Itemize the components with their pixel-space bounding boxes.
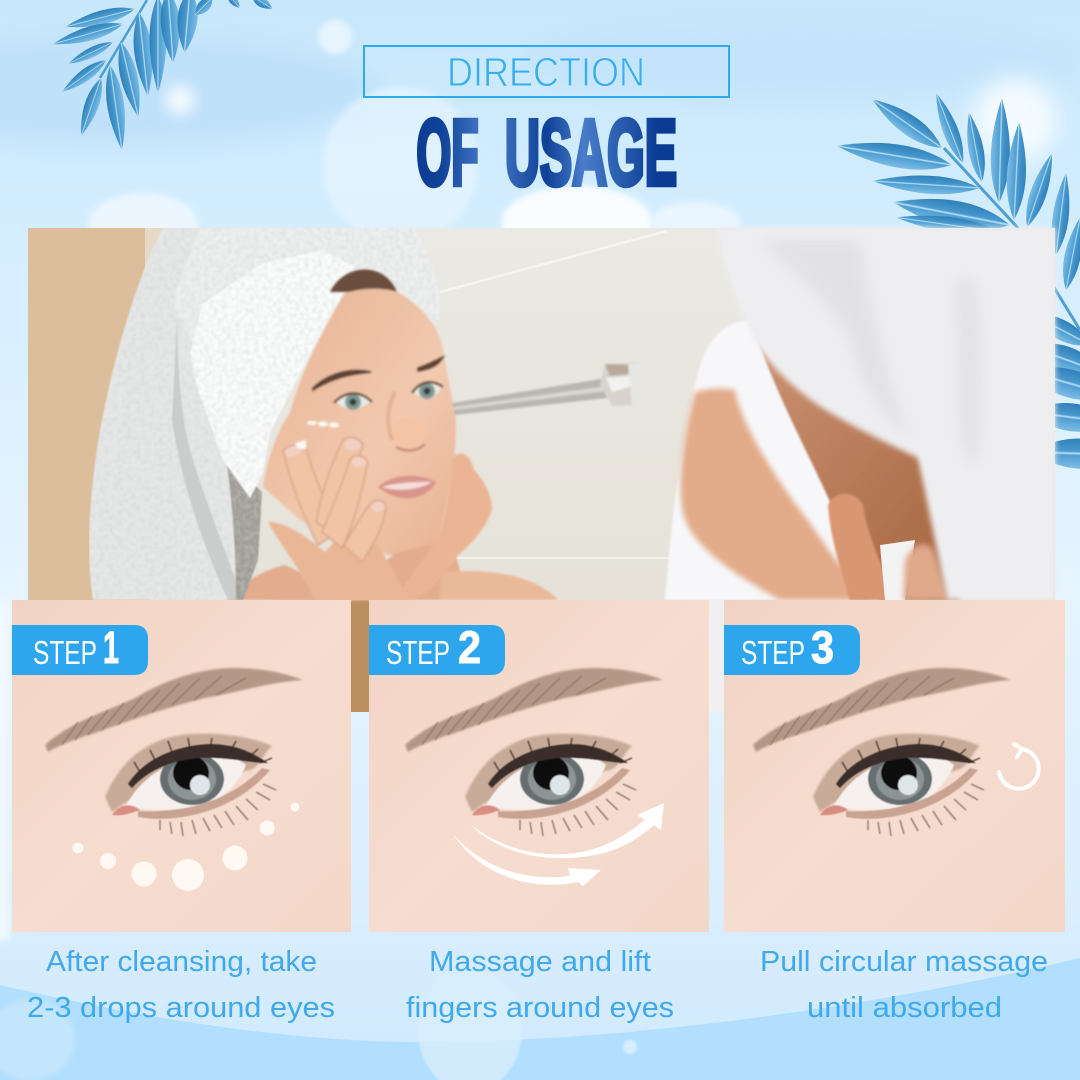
mirror skin [755, 340, 960, 600]
caption: step 2: fingers around eyes [406, 992, 674, 1024]
caption: step 1: After cleansing, take [46, 946, 317, 978]
title: OF USAGE: USAGE [505, 100, 677, 204]
small white towel [665, 320, 880, 600]
step 3 badge: STEP [741, 634, 805, 671]
leaves: top left [51, 0, 275, 151]
step 2 badge: 2 [458, 622, 481, 673]
massage arrow upper [471, 803, 664, 858]
step 2 badge: STEP [386, 634, 450, 671]
mirror thumb [828, 494, 895, 600]
step 1 badge [12, 622, 148, 675]
large blurred towel [717, 228, 1055, 600]
caption: step 3: Pull circular massage [760, 946, 1048, 978]
woman's left hand [395, 453, 492, 600]
massage arrow lower [453, 834, 601, 886]
title box: DIRECTION [364, 46, 729, 97]
circular massage arrow [999, 744, 1039, 789]
caption: step 1 [27, 946, 335, 1024]
title: OF USAGE: OF [416, 100, 478, 204]
step 3 badge: 3 [811, 622, 834, 673]
caption: step 2: Massage and lift [429, 946, 651, 978]
panel: step 1 [12, 600, 351, 932]
shoulder [222, 565, 360, 600]
photo wall [28, 228, 1055, 712]
caption: step 3 [760, 946, 1048, 1024]
step 2 badge [369, 622, 505, 675]
mirror hand [680, 389, 870, 600]
caption: step 2 [406, 946, 674, 1024]
eye close-up 2 [369, 600, 709, 932]
title box: DIRECTION: DIRECTION [447, 49, 645, 95]
photo: woman applying cream in mirror [28, 228, 1055, 712]
step 3 badge [724, 622, 860, 675]
towel on woman's head [89, 228, 441, 600]
panel: step 2 [369, 600, 709, 932]
eye close-up 3 [724, 600, 1065, 932]
leaves: top right [835, 90, 1080, 470]
caption: step 3: until absorbed [807, 992, 1002, 1024]
eye close-up 1 [12, 600, 351, 932]
panel: step 3 [724, 600, 1065, 932]
caption: step 1: 2-3 drops around eyes [27, 992, 335, 1024]
white cream dots [72, 802, 300, 891]
woman's face [263, 270, 558, 600]
towel corner and finger [880, 540, 915, 600]
woman's right hand [268, 438, 410, 600]
mirror: towel, skin and hand [665, 228, 1055, 600]
step 1 badge: 1 [103, 622, 119, 673]
step 1 badge: STEP [33, 634, 97, 671]
title: OF USAGE [416, 100, 677, 204]
towel bar [446, 362, 648, 416]
